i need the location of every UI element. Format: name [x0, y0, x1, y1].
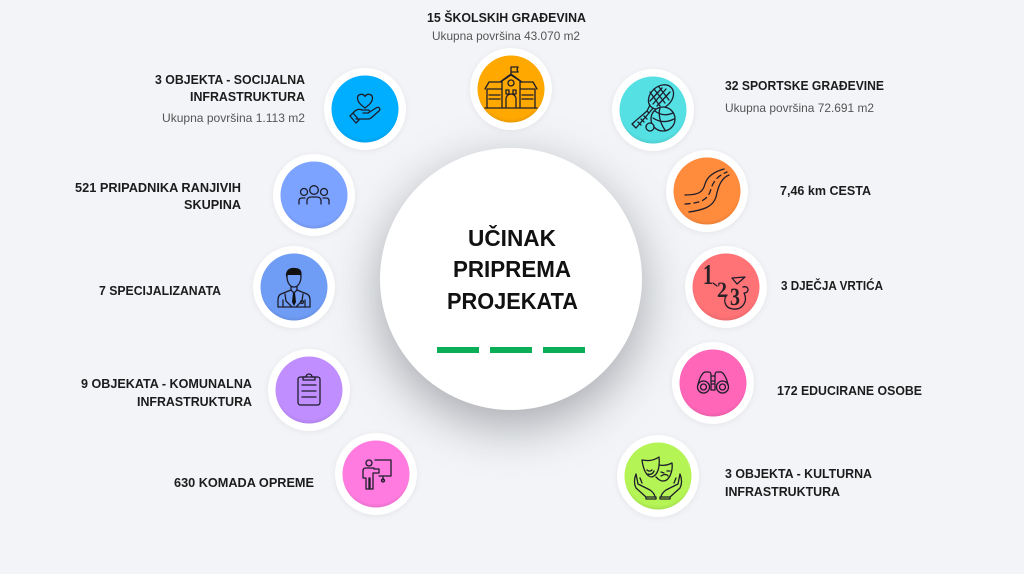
icon: numbers 1 2 3: 3 [730, 284, 740, 311]
item: equipment [174, 433, 417, 516]
label: kindergartens: 3 DJEČJA VRTIĆA [781, 278, 884, 293]
label: vulnerable groups: 521 PRIPADNIKA RANJIVIH [75, 180, 241, 195]
label: school buildings: Ukupna površina 43.070 m2 [432, 29, 580, 43]
item: vulnerable groups [75, 154, 355, 237]
central title: UČINAK [468, 224, 556, 251]
label: utility infrastructure [81, 376, 253, 409]
central circle [378, 148, 644, 428]
icon: presenter at board [335, 433, 417, 516]
label: sports buildings: 32 SPORTSKE GRAĐEVINE [725, 78, 884, 93]
label: social infrastructure: Ukupna površina 1.113 m2 [162, 111, 305, 125]
item: school buildings [427, 10, 587, 131]
central title: PRIPREMA [453, 256, 571, 282]
label: social infrastructure: INFRASTRUKTURA [190, 89, 306, 104]
label: social infrastructure: 3 OBJEKTA - SOCIJALNA [155, 72, 306, 87]
central title: PROJEKATA [447, 288, 578, 314]
item: roads [666, 150, 872, 233]
label: educated people: 172 EDUCIRANE OSOBE [777, 383, 922, 398]
icon: numbers 1 2 3 [685, 246, 767, 329]
label: sports buildings [725, 78, 884, 115]
label: utility infrastructure: 9 OBJEKATA - KOMUNALNA [81, 376, 253, 391]
label: medical specialists: 7 SPECIJALIZANATA [99, 283, 222, 298]
label: cultural infrastructure [725, 466, 873, 499]
label: social infrastructure [155, 72, 306, 125]
label: equipment: 630 KOMADA OPREME [174, 475, 314, 490]
item: kindergartens [685, 246, 884, 329]
item: cultural infrastructure [617, 435, 873, 518]
label: sports buildings: Ukupna površina 72.691 m2 [725, 101, 874, 115]
icon: heart in hand [324, 68, 406, 151]
label: roads: 7,46 km CESTA [780, 183, 872, 198]
icon: numbers 1 2 3: 2 [717, 277, 727, 302]
label: vulnerable groups: SKUPINA [184, 197, 242, 212]
item: sports buildings [612, 69, 884, 152]
icon: clipboard [268, 349, 350, 432]
label: utility infrastructure: INFRASTRUKTURA [137, 394, 253, 409]
label: school buildings [427, 10, 587, 43]
icon: school [470, 48, 552, 131]
icon: binoculars [672, 342, 754, 425]
green dashes [437, 347, 585, 353]
item: educated people [672, 342, 922, 425]
icon: racket and ball [612, 69, 694, 152]
item: medical specialists [99, 246, 335, 329]
icon: numbers 1 2 3: 1 [703, 260, 713, 291]
central title [447, 224, 578, 314]
item: social infrastructure [155, 68, 406, 151]
icon: doctor [253, 246, 335, 329]
icon: theatre masks in hands [617, 435, 699, 518]
icon: people [273, 154, 355, 237]
label: cultural infrastructure: INFRASTRUKTURA [725, 484, 841, 499]
label: vulnerable groups [75, 180, 242, 212]
label: cultural infrastructure: 3 OBJEKTA - KULTURNA [725, 466, 873, 481]
icon: road [666, 150, 748, 233]
label: school buildings: 15 ŠKOLSKIH GRAĐEVINA [427, 10, 587, 25]
item: utility infrastructure [81, 349, 350, 432]
